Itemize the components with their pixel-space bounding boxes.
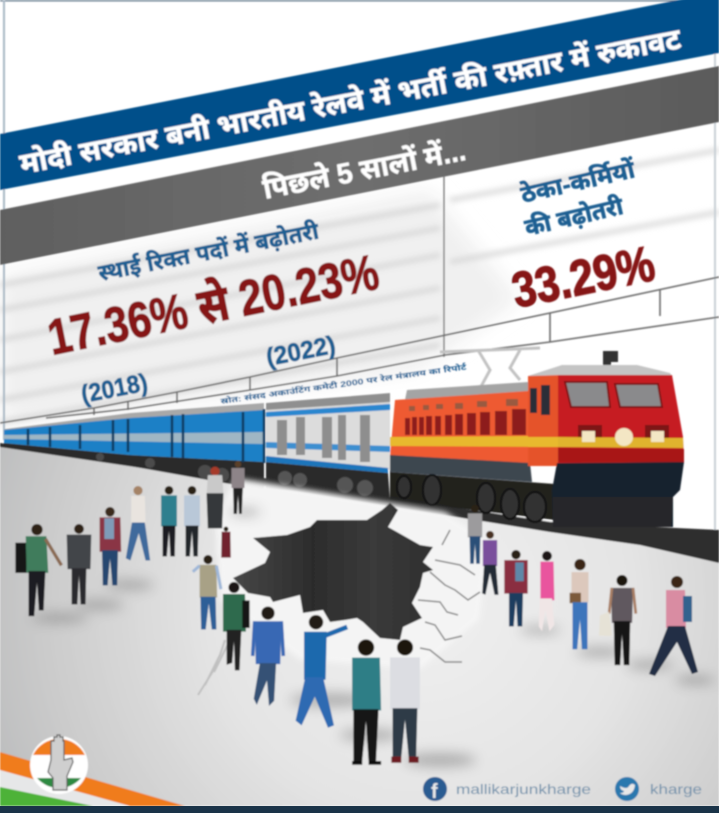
- headlights: [578, 425, 669, 439]
- stat: contract workers 33.29: 33.29%: [507, 235, 659, 319]
- grey sub-heading band: [0, 66, 719, 265]
- person 1: [15, 524, 61, 616]
- crater: [233, 503, 433, 640]
- floor: [0, 443, 719, 806]
- source note: स्रोत: संसद अकाउंटिंग कमेटी 2000 पर रेल मंत्रालय का रिपोर्ट: [220, 361, 468, 406]
- blue coaches: [4, 403, 264, 490]
- train: [4, 348, 684, 527]
- catenary wires and poles: [0, 277, 719, 423]
- silver coach: [266, 393, 390, 500]
- cowcatcher grille: [553, 497, 673, 527]
- title banner: [0, 0, 719, 190]
- front stripe: [558, 437, 683, 448]
- logo: hand symbol: [30, 735, 88, 794]
- label: 2018: (2018): [79, 369, 150, 409]
- side grilles: [405, 409, 526, 435]
- person 3: [100, 507, 121, 585]
- side stripes: [390, 436, 560, 447]
- person 22: [649, 576, 698, 676]
- heading: last 5 years: पिछले 5 सालों में...: [260, 133, 469, 206]
- person 19: [539, 551, 554, 631]
- person 17: [482, 531, 498, 595]
- person 8: [232, 461, 244, 514]
- person 5: [161, 486, 177, 557]
- white ground patch around crater: [215, 478, 490, 670]
- person 9: [221, 527, 231, 558]
- person 14: [352, 639, 381, 765]
- front windows: [565, 382, 662, 407]
- person 4: [126, 486, 150, 560]
- bogies: [390, 472, 555, 520]
- corner tricolour stripes: [0, 752, 185, 806]
- person 20: [570, 559, 588, 649]
- stat: vacancies 17.36 to 20.23: 17.36% से 20.23%: [43, 244, 383, 366]
- person 13: [296, 615, 347, 728]
- loco front: [558, 375, 684, 465]
- sky streaks: [0, 150, 719, 422]
- track shadow: [0, 443, 719, 563]
- social: twitter: kharge: [650, 781, 702, 797]
- sky tint: [0, 190, 520, 425]
- loco side: [390, 391, 528, 468]
- label: contract workers: [518, 155, 638, 242]
- heading: title: मोदी सरकार बनी भारतीय रेलवे में भर्ती की रफ़्तार में रुकावट: [17, 21, 685, 181]
- label: permanent vacancies: स्थाई रिक्त पदों में बढ़ोतरी: [96, 217, 322, 287]
- side small windows: [409, 399, 518, 411]
- column divider: [443, 176, 445, 357]
- loco roof: [405, 382, 528, 400]
- label: contract workers: ठेका-कर्मियों: [518, 155, 638, 209]
- roof horn: [603, 351, 618, 366]
- person 7: [207, 467, 223, 528]
- people shadows: [32, 508, 715, 767]
- label: contract workers: की बढ़ोतरी: [522, 192, 627, 242]
- social: facebook: mallikarjunkharge: [456, 781, 591, 797]
- person 12: [253, 606, 283, 706]
- person 11: [223, 582, 250, 670]
- person 10: [193, 555, 221, 629]
- person 2: [67, 524, 91, 604]
- social: twitter: [615, 777, 702, 801]
- person 18: [504, 550, 528, 626]
- social: facebook: [423, 777, 591, 803]
- lamps: [582, 428, 664, 446]
- social: facebook: f: [431, 781, 438, 803]
- label: 2022: (2022): [264, 331, 338, 372]
- pantographs: [440, 348, 540, 392]
- top and side frame lines: [0, 0, 719, 540]
- person 16: [468, 505, 482, 564]
- person 15: [390, 639, 420, 763]
- person 6: [184, 486, 200, 557]
- front lower: [552, 462, 684, 527]
- bottom bar: [0, 806, 719, 813]
- cab side: [528, 375, 562, 466]
- person 21: [599, 575, 636, 665]
- ground cracks: [198, 530, 480, 695]
